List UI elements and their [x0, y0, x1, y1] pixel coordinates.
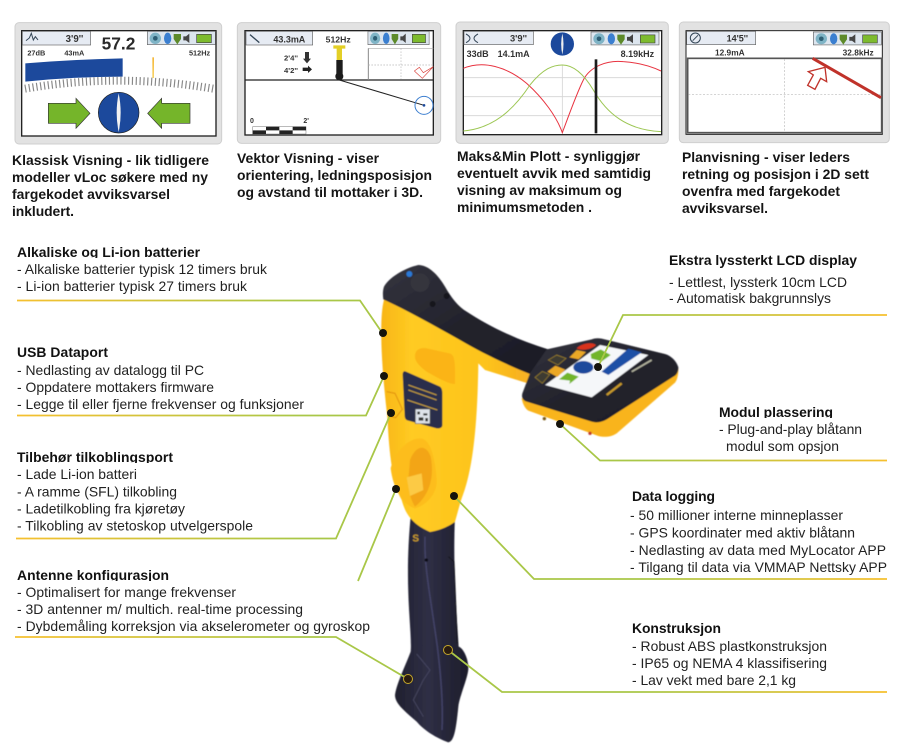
text block: data logging [630, 488, 887, 575]
caption: vector view [237, 150, 432, 200]
panel: classic view screen: 3'9'' [66, 34, 83, 45]
text block: data logging: - Nedlasting av data med MyLocator APP [630, 542, 886, 558]
text block: accessory port: - Ladetilkobling fra kjøretøy [17, 500, 185, 516]
caption: classic view: modeller vLoc søkere med ny [12, 169, 208, 185]
caption: classic view: fargekodet avviksvarsel [12, 186, 170, 202]
text block: batteries: - Alkaliske batterier typisk 12 timers bruk [17, 261, 267, 277]
panel: vector view screen: 4'2'' [284, 66, 298, 75]
caption: max and min plot: minimumsmetoden . [457, 199, 592, 215]
caption: plan view: Planvisning - viser leders [682, 149, 850, 165]
device: lower black antenna housing: S [412, 533, 419, 544]
panel: classic view screen: 27dB [27, 48, 45, 57]
leader line: data logging [450, 492, 887, 579]
leader line: antenna configuration [15, 637, 412, 684]
text block: accessory port [15, 449, 253, 534]
text block: LCD display: - Lettlest, lyssterk 10cm LCD [669, 274, 847, 290]
leader line: module location [556, 420, 887, 460]
panel: plan view screen [679, 22, 889, 143]
text block: antenna configuration: - 3D antenner m/ multich. real-time processing [17, 601, 303, 617]
panel: vector view screen: 2'4'' [284, 54, 298, 63]
caption: classic view [12, 152, 209, 219]
text block: antenna configuration: Antenne konfigurasjon [17, 567, 169, 583]
caption: vector view: orientering, ledningsposisjon [237, 167, 432, 183]
text block: antenna configuration: - Dybdemåling korreksjon via akselerometer og gyroskop [17, 618, 370, 634]
panel: classic view screen: 43mA [64, 48, 85, 57]
text block: LCD display [669, 252, 857, 306]
text block: data logging: - 50 millioner interne minneplasser [630, 507, 843, 523]
caption: max and min plot: eventuelt avvik med samtidig [457, 165, 651, 181]
panel: max and min plot screen: 8.19kHz [621, 49, 655, 59]
text block: data logging: Data logging [632, 488, 715, 504]
text block: accessory port: Tilbehør tilkoblingsport [17, 449, 173, 465]
caption: classic view: inkludert. [12, 203, 74, 219]
caption: classic view: Klassisk Visning - lik tidligere [12, 152, 209, 168]
panel: vector view screen: 43.3mA [273, 34, 306, 44]
device: black handle [383, 265, 548, 374]
text block: module location: Modul plassering [719, 404, 833, 420]
leader line: construction [444, 646, 887, 692]
caption: plan view: avviksvarsel. [682, 200, 768, 216]
text block: construction: - Robust ABS plastkonstruksjon [632, 638, 827, 654]
text block: construction: - IP65 og NEMA 4 klassifisering [632, 655, 827, 671]
text block: USB data port: USB Dataport [17, 344, 108, 360]
text block: USB data port: - Oppdatere mottakers firmware [17, 379, 214, 395]
text block: batteries: Alkaliske og Li-ion batterier [17, 244, 201, 260]
text block: accessory port: - A ramme (SFL) tilkobling [17, 484, 177, 500]
device: display panel [522, 338, 678, 437]
device: locator illustration [381, 265, 678, 742]
caption: max and min plot [457, 148, 651, 215]
panel: vector view screen: 512Hz [326, 34, 351, 44]
text block: construction: - Lav vekt med bare 2,1 kg [632, 672, 796, 688]
text block: accessory port: - Lade Li-ion batteri [17, 466, 137, 482]
text block: antenna configuration [15, 567, 370, 634]
text block: module location: - Plug-and-play blåtann [719, 421, 862, 437]
text block: USB data port: - Nedlasting av datalogg til PC [17, 362, 204, 378]
panel: classic view screen: 512Hz [189, 48, 211, 57]
caption: plan view: ovenfra med fargekodet [682, 183, 840, 199]
text block: batteries: - Li-ion batterier typisk 27 timers bruk [17, 278, 247, 294]
panel: classic view screen: 57.2 [102, 33, 135, 53]
text block: module location [717, 404, 862, 454]
device: yellow body [381, 297, 533, 532]
text block: batteries [15, 244, 267, 294]
text block: antenna configuration: - Optimalisert for mange frekvenser [17, 584, 236, 600]
leader line: accessory port [16, 409, 395, 538]
panel: max and min plot screen: 14.1mA [498, 49, 530, 59]
text block: construction: Konstruksjon [632, 620, 721, 636]
panel: max and min plot screen: 3'9'' [510, 34, 527, 44]
panel: plan view screen: 14'5'' [727, 34, 748, 44]
panel: plan view screen: 12.9mA [715, 48, 745, 58]
leader line: batteries [17, 300, 387, 337]
panel: max and min plot screen [456, 22, 668, 143]
leader line: antenna upper dot [358, 485, 400, 581]
panel: vector view screen: 2' [303, 118, 309, 125]
caption: vector view: og avstand til mottaker i 3D. [237, 184, 423, 200]
panel: vector view screen [237, 23, 441, 143]
caption: max and min plot: visning av maksimum og [457, 182, 622, 198]
text block: data logging: - Tilgang til data via VMMAP Nettsky APP [630, 559, 887, 575]
leader line: USB port [17, 372, 388, 416]
text block: accessory port: - Tilkobling av stetoskop utvelgerspole [17, 518, 253, 534]
text block: LCD display: - Automatisk bakgrunnslys [669, 290, 831, 306]
caption: plan view [682, 149, 869, 216]
panel: classic view screen [15, 23, 222, 144]
leader line: LCD display [594, 315, 887, 371]
text block: LCD display: Ekstra lyssterkt LCD display [669, 252, 857, 268]
caption: max and min plot: Maks&Min Plott - synliggjør [457, 148, 641, 164]
text block: module location: modul som opsjon [726, 438, 839, 454]
device: lower black antenna housing [395, 517, 468, 742]
text block: data logging: - GPS koordinater med aktiv blåtann [630, 524, 855, 540]
panel: plan view screen: 32.8kHz [843, 48, 874, 58]
caption: plan view: retning og posisjon i 2D sett [682, 166, 869, 182]
caption: vector view: Vektor Visning - viser [237, 150, 380, 166]
text block: USB data port: - Legge til eller fjerne frekvenser og funksjoner [17, 396, 304, 412]
text block: construction [632, 620, 827, 688]
panel: vector view screen: 0 [250, 118, 254, 125]
panel: max and min plot screen: 33dB [467, 49, 489, 59]
text block: USB data port [17, 344, 304, 412]
